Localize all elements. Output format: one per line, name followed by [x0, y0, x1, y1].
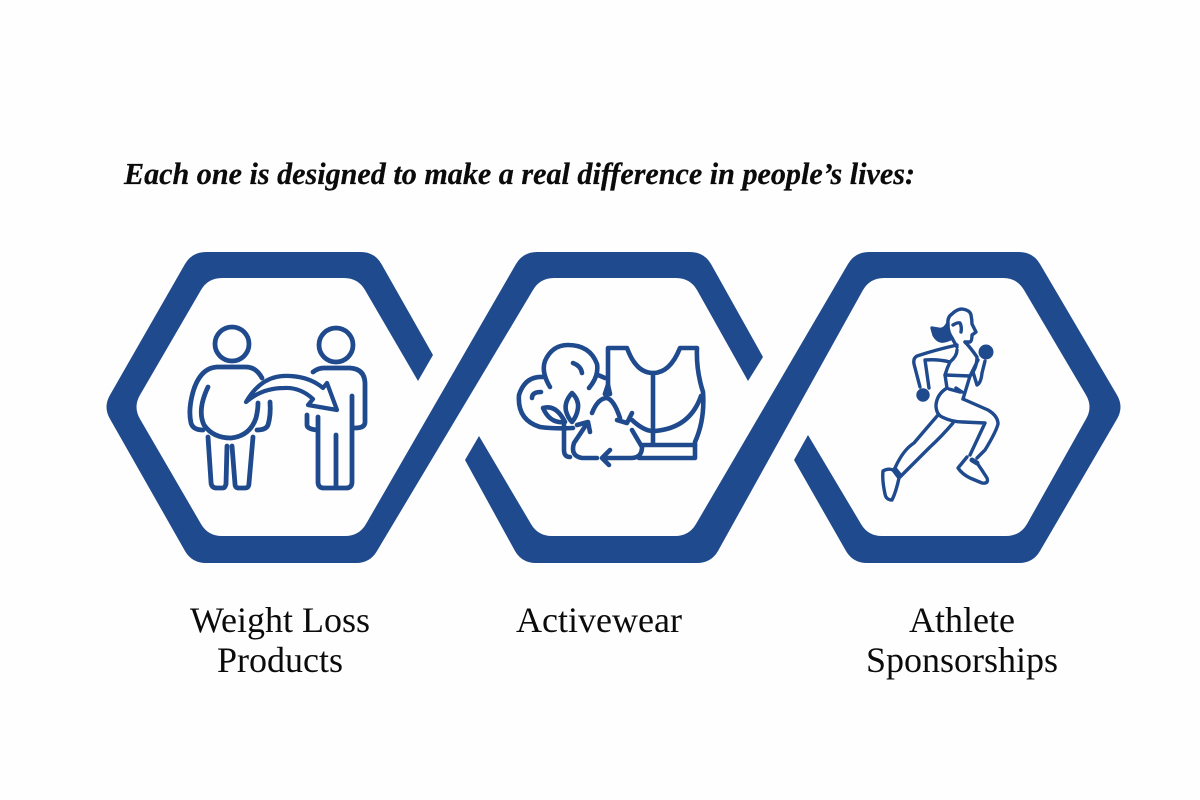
label: weight loss products: Products [217, 640, 343, 680]
label: weight loss products: Weight Loss [190, 600, 370, 640]
icon: cotton, recycling and sports bra [519, 345, 703, 465]
hexagon ribbon frame: second and third hexagon [465, 252, 1120, 563]
icon: running woman [883, 309, 998, 500]
icon: weight loss people with arrow [190, 327, 365, 488]
label: athlete sponsorships: Sponsorships [866, 640, 1058, 680]
label: activewear: Activewear [516, 600, 682, 640]
hexagon ribbon frame: first and second hexagon [106, 252, 763, 563]
label: athlete sponsorships: Athlete [909, 600, 1015, 640]
title: Each one is designed to make a real difference in people’s lives: [123, 156, 915, 191]
